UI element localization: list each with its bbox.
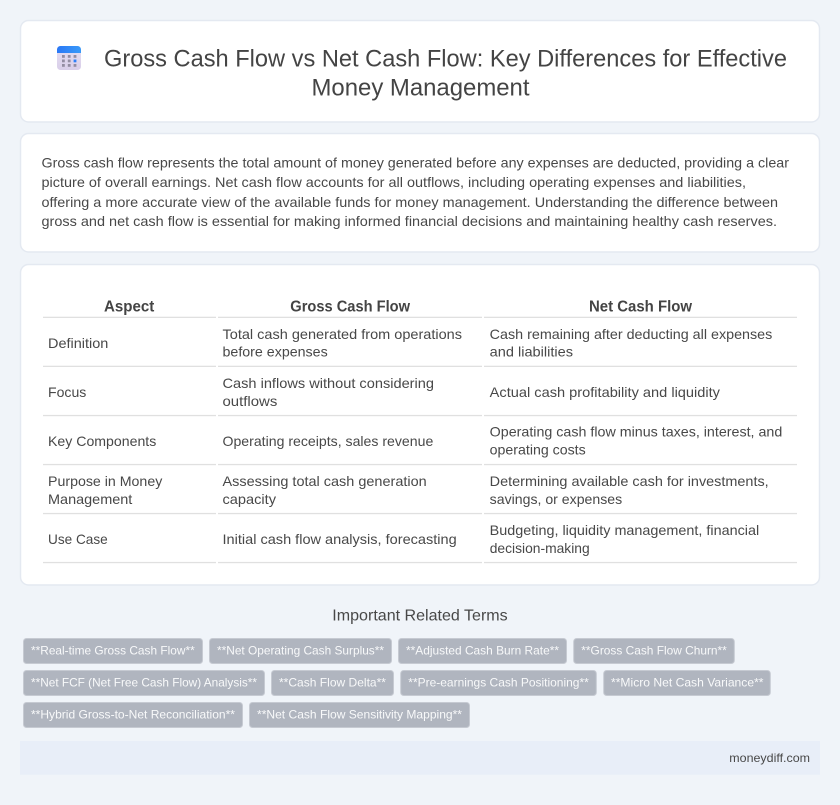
table rules (43, 317, 797, 563)
tag: **Micro Net Cash Variance** (611, 676, 764, 690)
table row: purpose in money management: Purpose in Money (48, 473, 162, 489)
footer: moneydiff.com (729, 751, 810, 765)
table header row: Aspect (104, 299, 155, 316)
tag (272, 670, 394, 696)
text block: introduction paragraph: gross and net cash flow is essential for making informed financial decisions and maintaining healthy cash reserves. (42, 213, 777, 229)
icon: calendar (57, 46, 81, 70)
tag (401, 670, 596, 696)
table row: purpose in money management: Assessing total cash generation (222, 473, 427, 489)
tag (24, 702, 242, 728)
tag: **Real-time Gross Cash Flow** (31, 644, 195, 658)
tag: **Pre-earnings Cash Positioning** (408, 676, 589, 690)
table row: use case (48, 522, 759, 556)
table row: focus: outflows (222, 393, 277, 409)
text block: introduction paragraph: Gross cash flow represents the total amount of money generated before any expenses are deducted, providing a clear (42, 155, 789, 171)
table row: definition: Total cash generated from operations (222, 326, 462, 342)
table row: definition: before expenses (222, 344, 328, 360)
panel: title card (20, 20, 820, 122)
tag: **Adjusted Cash Burn Rate** (406, 644, 559, 658)
tag (574, 638, 734, 664)
table header row: Net Cash Flow (589, 299, 693, 316)
table row: key components: Operating cash flow minus taxes, interest, and (490, 424, 782, 440)
tag (398, 638, 566, 664)
table row: key components: Key Components (48, 433, 156, 449)
tag (604, 670, 770, 696)
text block: introduction paragraph: offering a more accurate view of the available funds for money management. Understanding the difference between (42, 194, 778, 210)
table row: definition: and liabilities (490, 344, 573, 360)
tag: **Cash Flow Delta** (279, 676, 386, 690)
table row: focus: Actual cash profitability and liquidity (490, 384, 720, 400)
heading: important related terms: Important Related Terms (332, 608, 508, 625)
table row: purpose in money management: savings, or expenses (490, 491, 622, 507)
table row: purpose in money management (48, 473, 769, 507)
table row: definition: Cash remaining after deducting all expenses (490, 326, 772, 342)
table row: focus: Focus (48, 384, 86, 400)
table row: use case: Use Case (48, 531, 108, 547)
table row: focus: Cash inflows without considering (222, 375, 434, 391)
title (104, 46, 787, 102)
tag: **Net FCF (Net Free Cash Flow) Analysis** (31, 676, 257, 690)
table header row: Gross Cash Flow (290, 299, 411, 316)
panel: introduction (20, 134, 820, 252)
tag: **Gross Cash Flow Churn** (581, 644, 727, 658)
tag: **Net Operating Cash Surplus** (217, 644, 384, 658)
table row: use case: decision-making (490, 540, 590, 556)
table row: use case: Initial cash flow analysis, forecasting (222, 531, 457, 547)
table row: purpose in money management: Determining available cash for investments, (490, 473, 769, 489)
tag: **Net Cash Flow Sensitivity Mapping** (257, 708, 462, 722)
tag (24, 670, 264, 696)
table row: purpose in money management: Management (48, 491, 132, 507)
table header row (104, 299, 693, 316)
table row: definition: Definition (48, 335, 108, 351)
tag: **Hybrid Gross-to-Net Reconciliation** (31, 708, 235, 722)
text block: introduction paragraph: picture of overall earnings. Net cash flow accounts for all outflows, including operating expenses and liabilities, (42, 174, 746, 190)
table row: purpose in money management: capacity (222, 491, 276, 507)
table row: key components: Operating receipts, sales revenue (222, 433, 434, 449)
table row: key components (48, 424, 782, 458)
table row: use case: Budgeting, liquidity management, financial (490, 522, 759, 538)
tag (24, 638, 202, 664)
title: Gross Cash Flow vs Net Cash Flow: Key Differences for Effective (104, 46, 787, 72)
tag (210, 638, 392, 664)
footer (20, 741, 820, 775)
table row: focus (48, 375, 720, 409)
table row: key components: operating costs (490, 442, 586, 458)
tag list: related terms (24, 638, 770, 728)
table row: definition (48, 326, 772, 360)
tag (250, 702, 470, 728)
title: Money Management (312, 75, 530, 102)
panel: comparison table (20, 264, 820, 585)
text block: introduction paragraph (42, 155, 789, 229)
